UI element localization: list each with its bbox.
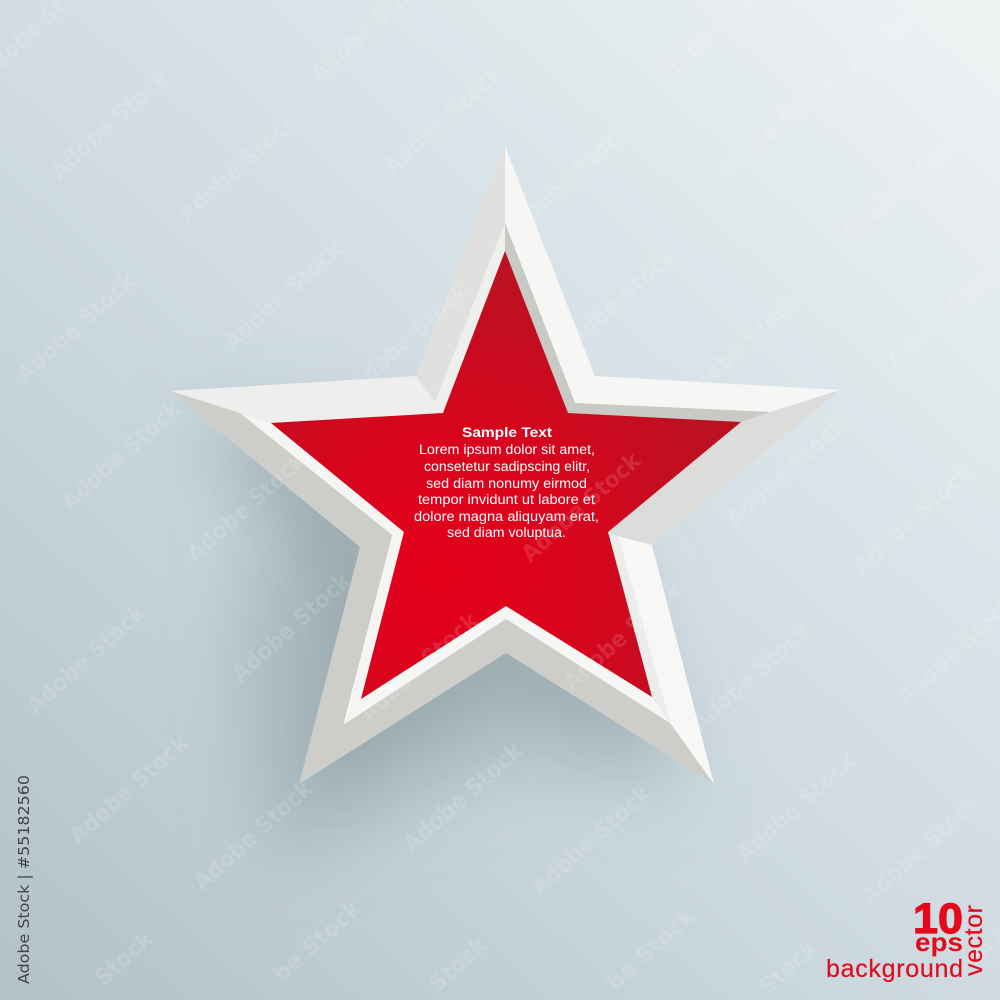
watermark: Adobe Stock (687, 618, 816, 738)
watermark: Adobe Stock (189, 776, 318, 896)
text paragraph: Lorem ipsum dolor sit amet, (419, 442, 595, 457)
watermark: Adobe Stock (219, 236, 348, 356)
badge eps: eps (915, 927, 963, 957)
stock id label: Adobe Stock | #55182560 (15, 775, 33, 984)
watermark: Adobe Stock (712, 68, 841, 188)
watermark: be Stock (268, 895, 367, 988)
watermark: Stock (90, 926, 159, 991)
red star panel (271, 251, 741, 699)
watermark: Adobe Stock (57, 396, 186, 516)
star body text (414, 425, 599, 540)
lower right light strip (608, 532, 670, 723)
watermark: Adobe Stock (552, 243, 681, 363)
watermark: Adobe Stock (174, 108, 303, 228)
star (170, 146, 840, 784)
star drop shadow (185, 420, 690, 860)
watermark: Adobe Stock (507, 118, 636, 238)
left arm lower bevel (170, 391, 392, 547)
right arm lower bevel (608, 390, 840, 545)
watermark: Adobe Stock (46, 65, 175, 185)
watermark: Adobe Stock (722, 413, 851, 533)
watermark: Adobe Stock (559, 576, 688, 696)
inner shaded edge (505, 223, 770, 422)
watermark: Adobe Stock (345, 279, 474, 399)
left arm top face (170, 376, 443, 423)
text paragraph: dolore magna aliquyam erat, (414, 509, 599, 524)
watermark: Stock (424, 932, 493, 997)
watermark: Adobe Stock (355, 608, 484, 728)
badge vector: vector (960, 905, 988, 976)
watermark: be Stock (602, 903, 701, 996)
watermark: Adobe Stock (527, 781, 656, 901)
watermark: Adobe Stock (517, 448, 646, 568)
vector badge (826, 895, 988, 983)
watermark: Stock (754, 935, 823, 1000)
text paragraph: sed diam nonumy eirmod (426, 476, 587, 491)
watermark: Adobe Stock (677, 288, 806, 408)
watermark: Adobe Stock (838, 128, 967, 248)
watermark: Adobe Stock (849, 460, 978, 580)
watermark: Adobe Stock (182, 448, 311, 568)
text heading: Sample Text (462, 425, 553, 440)
watermark: Adobe Stock (379, 61, 508, 181)
watermark: Adobe Stock (732, 748, 861, 868)
top arm left bevel (416, 146, 505, 402)
bottom grey bevel (299, 535, 714, 784)
watermark: Adobe Stock (857, 790, 986, 910)
top arm inner strip (435, 223, 505, 413)
badge number: 10 (913, 895, 963, 943)
watermark: Adobe Stock (399, 738, 528, 858)
bottom inner strip (343, 606, 670, 725)
text paragraph: consetetur sadipscing elitr, (424, 459, 590, 474)
watermark: Adobe Stock (12, 268, 141, 388)
text paragraph: tempor invidunt ut labore et (418, 492, 595, 507)
watermark: Adobe Stock (22, 600, 151, 720)
lower right white face (618, 536, 714, 784)
watermark: Adobe Stock (227, 568, 356, 688)
watermark: Adobe Stock (65, 730, 194, 850)
badge background: background (826, 955, 963, 983)
text paragraph (414, 442, 599, 540)
lower left inner strip (240, 413, 404, 725)
text paragraph: sed diam voluptua. (447, 525, 566, 540)
top arm and right arm white face (505, 146, 840, 412)
